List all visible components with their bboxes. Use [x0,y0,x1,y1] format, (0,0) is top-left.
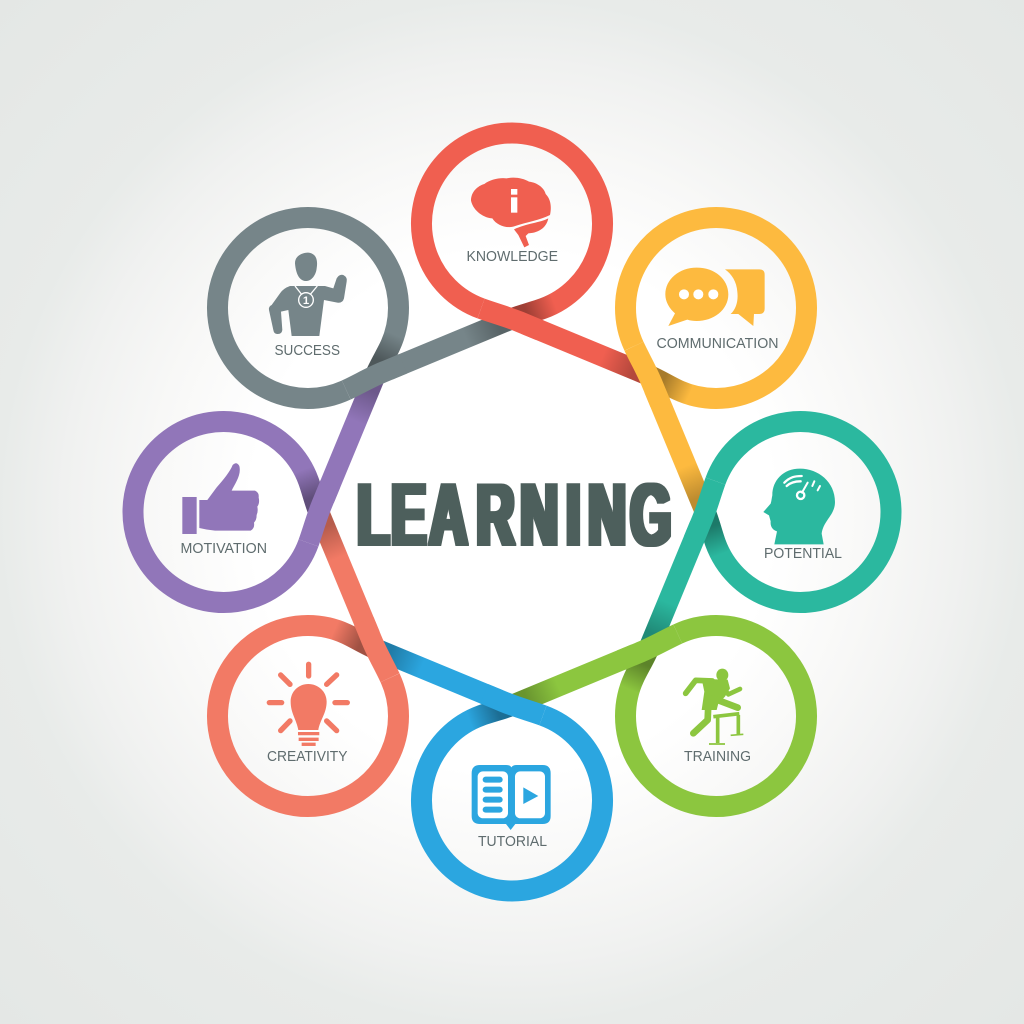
icon: thumbs up [182,463,259,534]
icon: brain [471,178,551,247]
crossing: communication tail [619,346,675,403]
panel: training [684,669,751,765]
label: knowledge: KNOWLEDGE [466,249,558,265]
crossing: creativity tail [349,621,405,678]
icon: hurdle runner [686,669,743,744]
label: communication: COMMUNICATION [656,336,778,352]
icon: book with play [472,765,551,830]
label: motivation: MOTIVATION [180,541,267,557]
label: training: TRAINING [684,749,751,765]
panel: potential [763,469,842,562]
ring: training [512,545,844,877]
crossing: training tail [621,619,678,675]
ring: success [180,147,512,479]
panel: success [269,253,347,359]
icon: light bulb [269,664,347,744]
crossing: tutorial tail [484,694,543,715]
icon: speech bubbles [665,268,765,326]
crossing: potential tail [694,481,715,540]
panel: communication [656,268,778,352]
title: LEARNING [357,466,671,564]
icon: person with medal: 1 [303,295,309,307]
icon: head with gauge [763,469,835,544]
panel: knowledge [466,178,558,265]
ribbon crossings layer [309,309,715,715]
label: creativity: CREATIVITY [267,749,348,765]
label: potential: POTENTIAL [764,546,842,562]
ring: communication [545,180,877,512]
crossing: motivation tail [309,484,330,543]
ring: motivation [133,375,375,602]
ring: potential [649,422,891,649]
ring: tutorial [375,649,602,891]
crossing: success tail [346,349,403,405]
panel: creativity [267,664,348,765]
ring: creativity [147,512,479,844]
label: success: SUCCESS [274,343,340,359]
ribbon rings layer [133,133,891,891]
panel: motivation [180,463,267,557]
ring: knowledge [422,133,649,375]
label: tutorial: TUTORIAL [478,834,547,850]
panel: tutorial [472,765,551,850]
crossing: knowledge tail [481,309,540,330]
